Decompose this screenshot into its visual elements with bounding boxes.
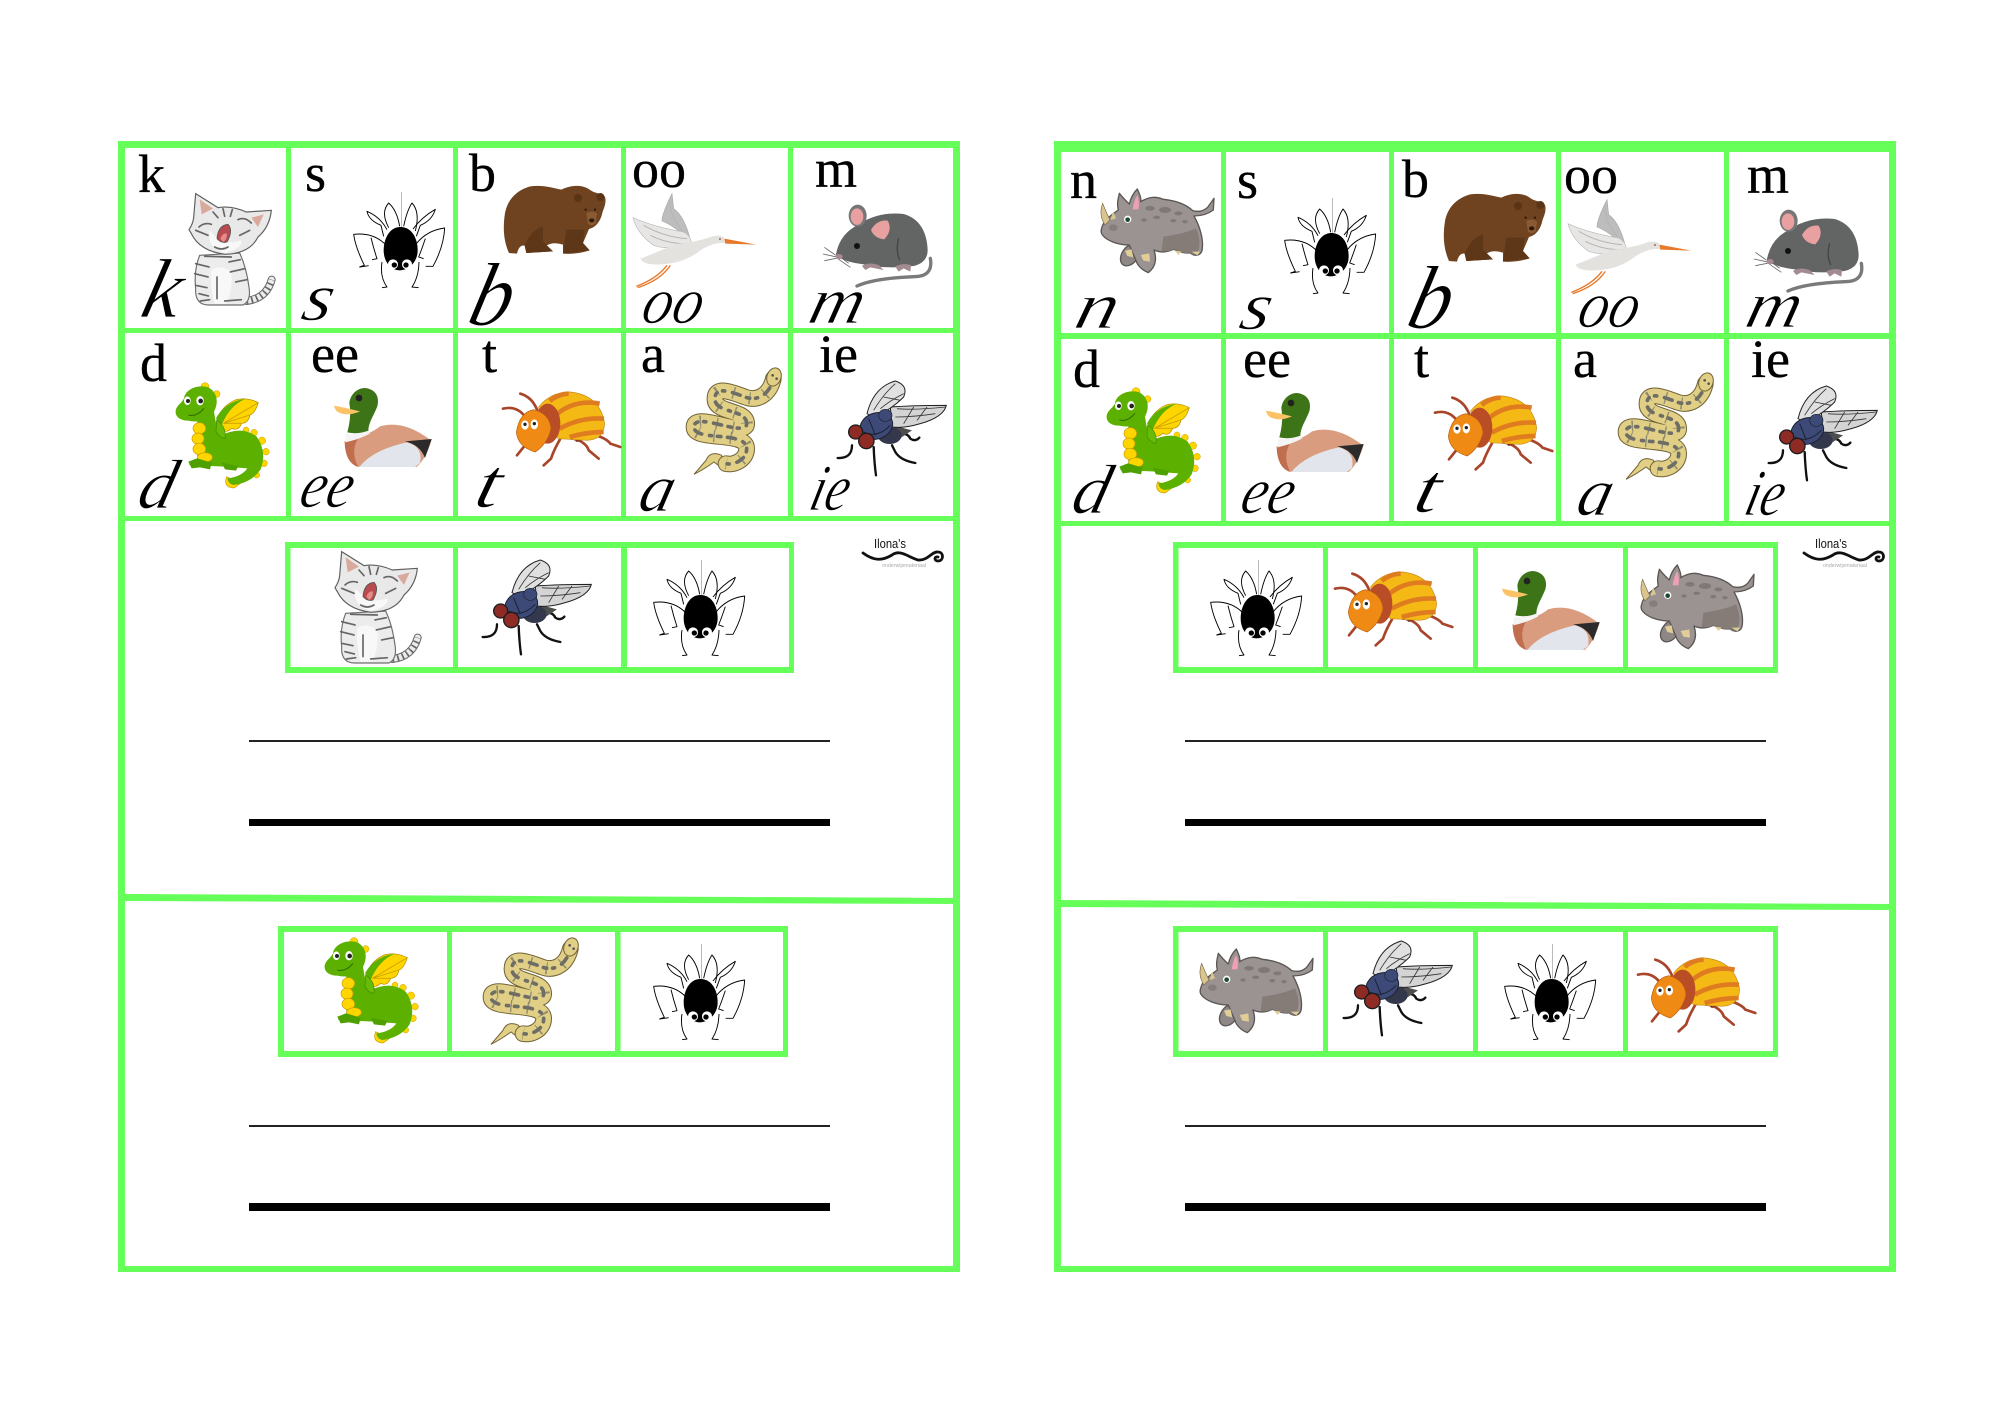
- card: oo stork: [1564, 145, 1691, 342]
- card: s spider: [295, 143, 445, 335]
- letter t: t: [482, 324, 497, 384]
- icon: stork: [633, 194, 756, 288]
- cursive m: m: [1739, 269, 1811, 342]
- icon: rhino: [1200, 949, 1313, 1033]
- cursive d: d: [1065, 452, 1121, 529]
- cursive k: k: [133, 243, 197, 336]
- letter s: s: [1237, 150, 1258, 210]
- card: n rhino: [1068, 150, 1214, 343]
- icon: bear: [504, 186, 606, 254]
- letters oo: oo: [1564, 145, 1618, 205]
- letter b: b: [1402, 149, 1429, 209]
- icon: spider: [1211, 560, 1302, 656]
- icon: kitten: [189, 194, 272, 305]
- left panel green frame: [118, 141, 960, 1272]
- exercise 4: picture strip rhino fly spider beetle: [1173, 926, 1778, 1057]
- icon: spider: [1285, 198, 1376, 294]
- icon: beetle: [503, 392, 620, 465]
- icon: spider: [654, 560, 745, 656]
- letter a: a: [1573, 329, 1597, 389]
- letter k: k: [138, 144, 165, 204]
- cursive n: n: [1068, 270, 1128, 343]
- card: ie fly: [803, 324, 946, 525]
- icon: spider: [1505, 944, 1596, 1040]
- exercise 2: picture strip dragon snake spider: [278, 926, 788, 1057]
- strip frame: [1173, 542, 1778, 673]
- strip frame: [278, 926, 788, 1057]
- icon: snake: [491, 936, 581, 1044]
- card: b bear: [1399, 149, 1546, 348]
- icon: spider: [354, 192, 445, 288]
- icon: snake: [694, 366, 784, 474]
- icon: bear: [1444, 194, 1546, 262]
- strip frame: [1173, 926, 1778, 1057]
- letters ee: ee: [311, 324, 359, 384]
- card: t beetle: [1407, 329, 1552, 528]
- cursive m: m: [802, 265, 874, 338]
- icon: beetle: [1638, 958, 1755, 1031]
- card: m mouse: [802, 139, 931, 338]
- writing lines exercise 3: [1185, 740, 1766, 826]
- card: m mouse: [1739, 145, 1862, 342]
- card: b bear: [460, 143, 606, 345]
- cursive ee: ee: [1234, 455, 1304, 528]
- card: k kitten: [133, 144, 272, 336]
- card: oo stork: [632, 139, 756, 338]
- letters ie: ie: [819, 324, 858, 384]
- icon: spider: [654, 944, 745, 1040]
- icon: snake: [1626, 371, 1716, 479]
- cursive t: t: [1407, 451, 1453, 528]
- letter d: d: [1073, 339, 1100, 399]
- cursive ie: ie: [803, 452, 859, 525]
- icon: beetle: [1435, 396, 1552, 469]
- letter a: a: [641, 324, 665, 384]
- icon: duck: [1502, 571, 1600, 650]
- logo: Ilona's: [863, 536, 942, 569]
- exercise 1: picture strip kitten fly spider: [285, 542, 794, 673]
- panel: left worksheet: [118, 139, 960, 1272]
- card: t beetle: [468, 324, 620, 523]
- cursive b: b: [1399, 248, 1466, 348]
- icon: mouse: [1754, 210, 1862, 291]
- panel: right worksheet: [1054, 141, 1896, 1272]
- letter t: t: [1414, 329, 1429, 389]
- cursive ee: ee: [293, 449, 363, 522]
- card: a snake: [632, 324, 784, 526]
- card: ee duck: [293, 324, 432, 522]
- cursive a: a: [1570, 454, 1623, 530]
- cursive ie: ie: [1738, 457, 1794, 530]
- icon: rhino: [1641, 565, 1754, 649]
- icon: dragon: [1107, 388, 1200, 493]
- icon: stork: [1568, 200, 1691, 294]
- writing lines exercise 4: [1185, 1125, 1766, 1211]
- card: d dragon: [131, 333, 269, 524]
- right panel green frame: [1054, 141, 1896, 1272]
- icon: fly: [1769, 386, 1877, 480]
- writing lines exercise 2: [249, 1125, 830, 1211]
- cursive oo: oo: [635, 265, 713, 338]
- card: ee duck: [1234, 329, 1364, 528]
- strip frame: [285, 542, 794, 673]
- card: ie fly: [1738, 329, 1877, 530]
- card: a snake: [1570, 329, 1716, 530]
- writing lines exercise 1: [249, 740, 830, 826]
- letter d: d: [140, 333, 167, 393]
- cursive a: a: [632, 450, 685, 526]
- letter b: b: [469, 143, 496, 203]
- letters ie: ie: [1751, 329, 1790, 389]
- icon: duck: [334, 388, 432, 467]
- cursive b: b: [460, 245, 527, 345]
- exercise 3: picture strip spider beetle duck rhino: [1173, 542, 1778, 673]
- letter m: m: [1747, 145, 1789, 205]
- icon: rhino: [1101, 189, 1214, 273]
- letter s: s: [305, 143, 326, 203]
- icon: beetle: [1335, 572, 1452, 645]
- icon: mouse: [823, 205, 931, 286]
- letters ee: ee: [1243, 329, 1291, 389]
- letters oo: oo: [632, 139, 686, 199]
- icon: fly: [483, 560, 591, 654]
- letter m: m: [815, 139, 857, 199]
- icon: dragon: [176, 383, 269, 488]
- icon: kitten: [335, 552, 418, 663]
- cursive s: s: [295, 259, 344, 335]
- card: d dragon: [1065, 339, 1200, 529]
- icon: fly: [1344, 941, 1452, 1035]
- cursive d: d: [131, 447, 187, 524]
- icon: dragon: [325, 938, 418, 1043]
- cursive oo: oo: [1571, 269, 1649, 342]
- icon: fly: [838, 381, 946, 475]
- logo: Ilona's: [1804, 536, 1884, 569]
- cursive s: s: [1233, 268, 1282, 344]
- card: s spider: [1233, 150, 1376, 344]
- cursive t: t: [468, 446, 514, 523]
- letter n: n: [1070, 150, 1097, 210]
- icon: duck: [1266, 393, 1364, 472]
